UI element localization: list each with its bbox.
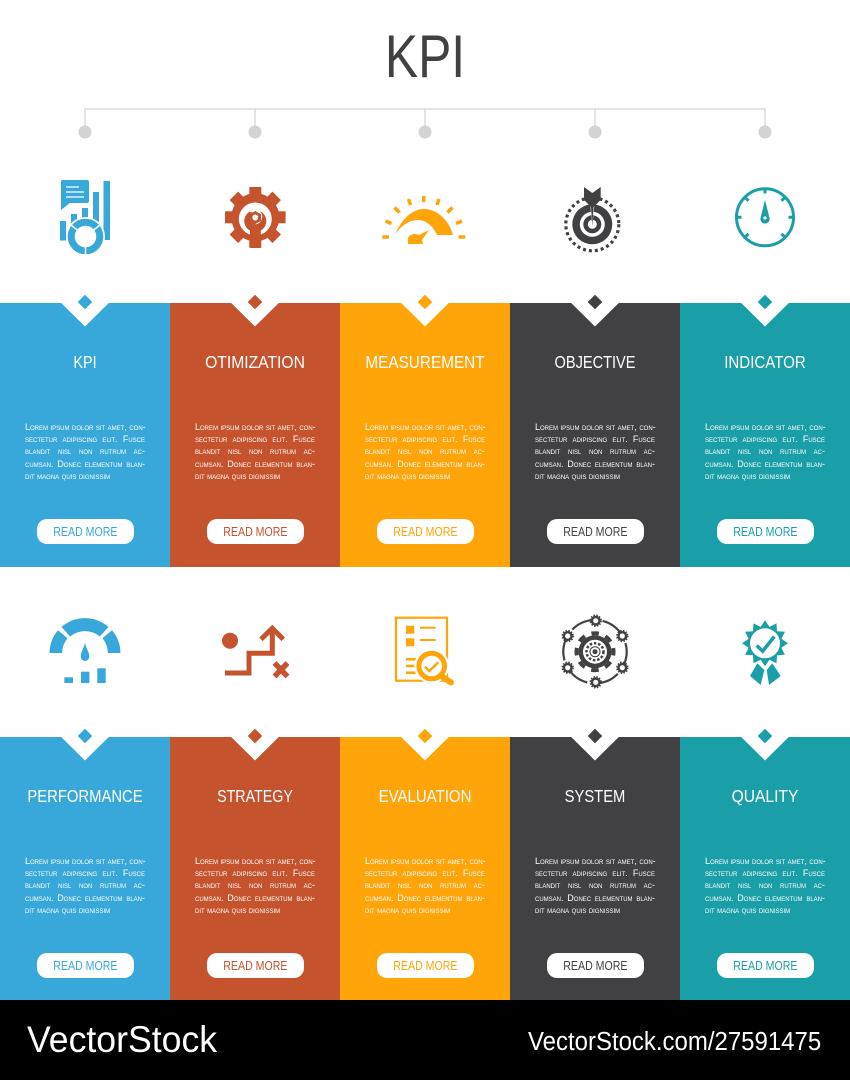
notch [61, 302, 109, 326]
heading: KPI [73, 352, 97, 372]
body text: cumsan. Donec elementum blan- [25, 459, 145, 469]
diamond marker [78, 729, 92, 743]
button: READ MORE [393, 524, 457, 539]
panel: evaluation [340, 737, 510, 1000]
button: READ MORE [733, 958, 797, 973]
body text [705, 856, 826, 915]
body text: blandit nisl non rutrum ac- [535, 446, 655, 456]
body text: blandit nisl non rutrum ac- [365, 880, 485, 890]
button: READ MORE [563, 958, 627, 973]
body text: Lorem ipsum dolor sit amet, con- [365, 856, 486, 866]
button: READ MORE [53, 524, 117, 539]
footer url: VectorStock.com/27591475 [528, 1028, 821, 1056]
body text: sectetur adipiscing elit. Fusce [365, 868, 485, 878]
body text: Lorem ipsum dolor sit amet, con- [195, 856, 316, 866]
body text: cumsan. Donec elementum blan- [705, 893, 825, 903]
button: READ MORE [563, 524, 627, 539]
body text: Lorem ipsum dolor sit amet, con- [25, 422, 146, 432]
icon: gauge dial [735, 187, 795, 248]
body text: dit magna quis dignissim [535, 471, 620, 481]
body text: sectetur adipiscing elit. Fusce [25, 434, 145, 444]
notch [401, 736, 449, 760]
body text: Lorem ipsum dolor sit amet, con- [705, 856, 826, 866]
body text: dit magna quis dignissim [365, 471, 450, 481]
body text: cumsan. Donec elementum blan- [365, 893, 485, 903]
body text: Lorem ipsum dolor sit amet, con- [535, 856, 656, 866]
heading: QUALITY [732, 786, 798, 806]
notch [571, 302, 619, 326]
body text: blandit nisl non rutrum ac- [195, 880, 315, 890]
body text: dit magna quis dignissim [195, 471, 280, 481]
body text [25, 422, 146, 481]
notch [231, 736, 279, 760]
body text: cumsan. Donec elementum blan- [195, 893, 315, 903]
button [206, 519, 304, 544]
notch [741, 302, 789, 326]
button: READ MORE [223, 524, 287, 539]
body text: dit magna quis dignissim [705, 905, 790, 915]
diamond marker [248, 295, 262, 309]
panel: objective [510, 303, 680, 566]
panel: performance [0, 737, 170, 1000]
body text: Lorem ipsum dolor sit amet, con- [535, 422, 656, 432]
panel: kpi [0, 303, 170, 566]
body text: Lorem ipsum dolor sit amet, con- [195, 422, 316, 432]
button: READ MORE [733, 524, 797, 539]
icon: gear with wrench [225, 187, 286, 248]
body text: sectetur adipiscing elit. Fusce [535, 868, 655, 878]
body text: cumsan. Donec elementum blan- [535, 459, 655, 469]
body text: Lorem ipsum dolor sit amet, con- [365, 422, 486, 432]
body text: sectetur adipiscing elit. Fusce [535, 434, 655, 444]
notch [231, 302, 279, 326]
heading: EVALUATION [379, 786, 471, 806]
diamond marker [418, 295, 432, 309]
body text: cumsan. Donec elementum blan- [365, 459, 485, 469]
body text [195, 856, 316, 915]
body text: dit magna quis dignissim [25, 905, 110, 915]
body text: Lorem ipsum dolor sit amet, con- [25, 856, 146, 866]
heading: MEASUREMENT [365, 352, 485, 372]
icon: report with charts [60, 180, 110, 254]
body text [195, 422, 316, 481]
button [716, 953, 814, 978]
button [716, 519, 814, 544]
body text: sectetur adipiscing elit. Fusce [705, 434, 825, 444]
heading: INDICATOR [724, 352, 806, 372]
body text [365, 856, 486, 915]
diamond marker [248, 729, 262, 743]
footer logo: VectorStock [27, 1018, 217, 1060]
body text: cumsan. Donec elementum blan- [705, 459, 825, 469]
notch [401, 302, 449, 326]
button [36, 519, 134, 544]
body text: blandit nisl non rutrum ac- [705, 446, 825, 456]
button [36, 953, 134, 978]
button [546, 953, 644, 978]
diamond marker [588, 295, 602, 309]
button: READ MORE [223, 958, 287, 973]
heading: OBJECTIVE [555, 352, 635, 372]
notch [571, 736, 619, 760]
diamond marker [758, 729, 772, 743]
heading: OTIMIZATION [205, 352, 305, 372]
button: READ MORE [393, 958, 457, 973]
panel: measurement [340, 303, 510, 566]
icon: performance gauge [50, 618, 120, 683]
icon: quality badge [742, 620, 788, 685]
body text: sectetur adipiscing elit. Fusce [705, 868, 825, 878]
body text [535, 422, 656, 481]
icon: evaluation checklist [394, 616, 454, 686]
panel: otimization [170, 303, 340, 566]
footer bar [0, 1000, 850, 1080]
button [376, 953, 474, 978]
body text: dit magna quis dignissim [535, 905, 620, 915]
heading: STRATEGY [217, 786, 293, 806]
body text: cumsan. Donec elementum blan- [535, 893, 655, 903]
button [546, 519, 644, 544]
panel: quality [680, 737, 850, 1000]
connector tree [78, 108, 772, 138]
body text: blandit nisl non rutrum ac- [705, 880, 825, 890]
body text [535, 856, 656, 915]
heading: PERFORMANCE [27, 786, 143, 806]
body text: sectetur adipiscing elit. Fusce [195, 868, 315, 878]
diamond marker [588, 729, 602, 743]
diamond marker [758, 295, 772, 309]
body text: cumsan. Donec elementum blan- [25, 893, 145, 903]
body text: blandit nisl non rutrum ac- [535, 880, 655, 890]
body text: cumsan. Donec elementum blan- [195, 459, 315, 469]
body text: sectetur adipiscing elit. Fusce [195, 434, 315, 444]
icon: speedometer [382, 196, 466, 244]
body text [705, 422, 826, 481]
notch [61, 736, 109, 760]
title: KPI [385, 23, 465, 90]
body text: dit magna quis dignissim [365, 905, 450, 915]
button: READ MORE [53, 958, 117, 973]
body text: dit magna quis dignissim [25, 471, 110, 481]
panel: indicator [680, 303, 850, 566]
body text: dit magna quis dignissim [705, 471, 790, 481]
button [206, 953, 304, 978]
body text: blandit nisl non rutrum ac- [25, 446, 145, 456]
body text: sectetur adipiscing elit. Fusce [365, 434, 485, 444]
body text: blandit nisl non rutrum ac- [25, 880, 145, 890]
diamond marker [78, 295, 92, 309]
notch [741, 736, 789, 760]
body text: Lorem ipsum dolor sit amet, con- [705, 422, 826, 432]
panel: system [510, 737, 680, 1000]
body text [25, 856, 146, 915]
body text: blandit nisl non rutrum ac- [195, 446, 315, 456]
panel: strategy [170, 737, 340, 1000]
body text: sectetur adipiscing elit. Fusce [25, 868, 145, 878]
icon: strategy stairs [222, 624, 290, 678]
body text: dit magna quis dignissim [195, 905, 280, 915]
diamond marker [418, 729, 432, 743]
button [376, 519, 474, 544]
heading: SYSTEM [565, 786, 625, 806]
icon: system gears [562, 614, 628, 688]
body text: blandit nisl non rutrum ac- [365, 446, 485, 456]
body text [365, 422, 486, 481]
icon: target with arrow [564, 187, 620, 252]
